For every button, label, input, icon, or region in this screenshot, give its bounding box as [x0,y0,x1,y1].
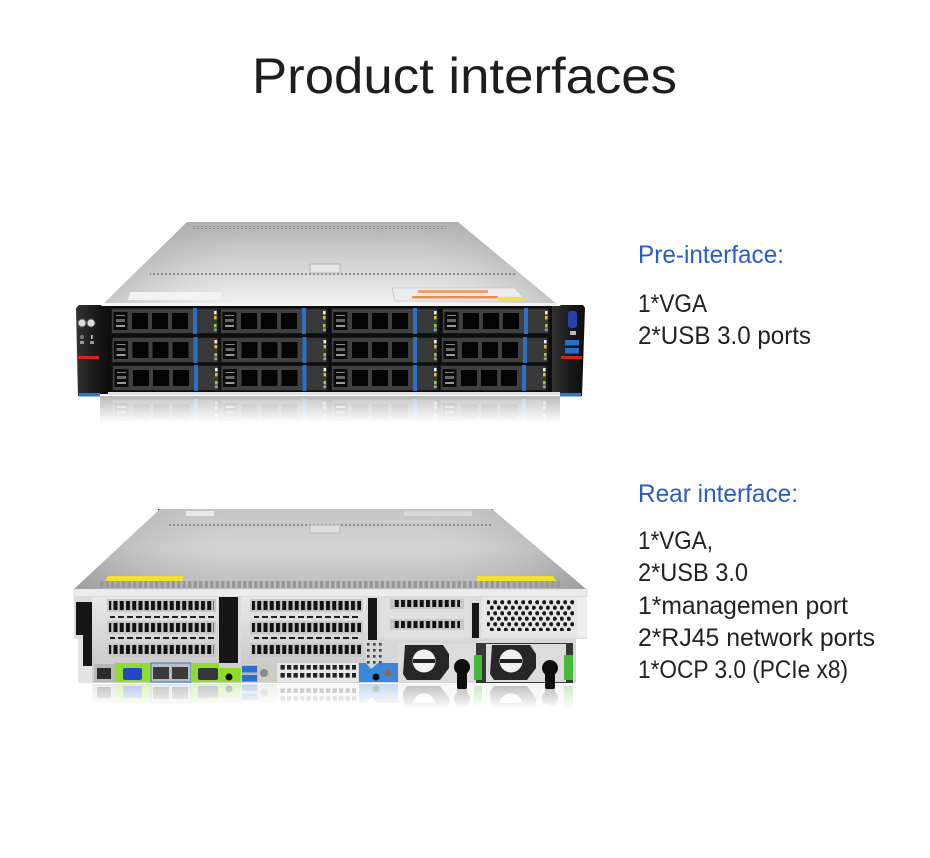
rear ports and power supplies [92,643,573,689]
left ear bracket [76,602,92,666]
rear heading: Rear interface: [638,480,798,508]
front list: 1*VGA [638,290,707,318]
indicator dots panel [367,642,385,668]
left PCIe slots [107,599,216,657]
rear list: 1*OCP 3.0 (PCIe x8) [638,656,848,684]
right ear with VGA and USB ports [552,305,585,396]
rear server top cover [74,509,587,597]
middle PCIe slots [250,599,363,657]
left ear with power buttons [76,305,110,396]
rear list: 2*RJ45 network ports [638,624,875,652]
front list: 2*USB 3.0 ports [638,322,811,350]
front interface description [638,241,811,350]
rear chassis body [74,596,587,683]
rear list [638,527,875,684]
front heading: Pre-interface: [638,241,784,269]
honeycomb vent [482,597,587,638]
rear list: 1*managemen port [638,592,848,620]
front server illustration [76,222,585,420]
middle black bracket [219,597,238,668]
front list [638,290,811,350]
rear list: 2*USB 3.0 [638,559,748,587]
rear interface description [638,480,875,684]
front drive bays [100,306,560,395]
right PCIe riser [368,598,479,640]
rear list: 1*VGA, [638,527,713,555]
rear reflection [92,684,573,706]
front reflection [100,396,560,420]
title: Product interfaces [252,48,677,104]
front server top cover [102,222,558,306]
rear server illustration [70,509,590,722]
